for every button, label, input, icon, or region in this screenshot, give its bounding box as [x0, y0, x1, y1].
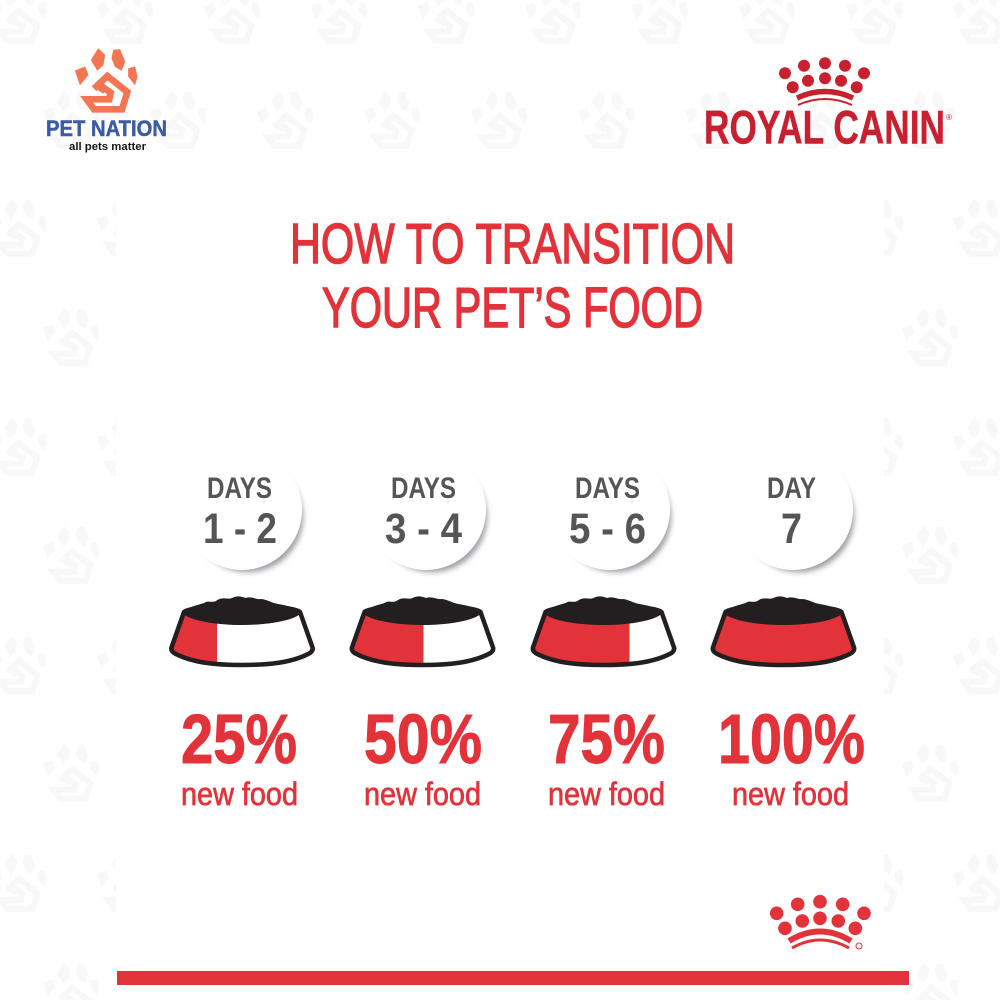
day badge 5-6: 5 - 6: [569, 505, 646, 553]
Pet Nation tagline: all pets matter: [69, 141, 147, 153]
day badge 7: [733, 450, 854, 572]
new food label: new food: [548, 776, 665, 812]
50% label: 50%: [364, 700, 482, 778]
day badge 7: 7: [781, 505, 802, 553]
title: HOW TO TRANSITION: [290, 212, 735, 276]
logo: Pet Nation: [46, 48, 167, 153]
100% label: 100%: [718, 700, 865, 778]
column: days 3-4, 50%: [348, 450, 493, 812]
day badge 1-2: [182, 450, 303, 572]
new food label: new food: [364, 776, 481, 812]
column: days 1-2, 25%: [167, 450, 313, 812]
day badge 5-6: DAYS: [575, 472, 640, 505]
Pet Nation wordmark: PET NATION: [46, 116, 167, 141]
25% label: 25%: [181, 700, 297, 778]
icon: bottom crown: [770, 895, 871, 949]
day badge 3-4: [366, 450, 487, 572]
title: YOUR PET’S FOOD: [322, 276, 703, 340]
day badge 1-2: 1 - 2: [203, 505, 277, 553]
day badge 1-2: DAYS: [207, 472, 272, 505]
bowl 100%: [713, 596, 854, 665]
bowl 50%: [348, 596, 493, 670]
75% label: 75%: [548, 700, 665, 778]
footer bar: [117, 971, 909, 985]
icon: Pet Nation paw: [75, 48, 137, 109]
column: day 7, 100%: [713, 450, 865, 812]
icon: Royal Canin crown: [779, 57, 870, 105]
day badge 3-4: 3 - 4: [385, 505, 462, 553]
new food label: new food: [732, 776, 849, 812]
day badge 5-6: [550, 450, 671, 572]
registered mark: ®: [946, 113, 952, 122]
bowl 75%: [528, 596, 674, 670]
day badge 3-4: DAYS: [391, 472, 456, 505]
day badge 7: DAY: [767, 472, 816, 505]
column: days 5-6, 75%: [528, 450, 674, 812]
bowl 25%: [167, 596, 313, 670]
title: [290, 212, 735, 340]
new food label: new food: [181, 776, 298, 812]
logo: Royal Canin: [704, 57, 952, 153]
